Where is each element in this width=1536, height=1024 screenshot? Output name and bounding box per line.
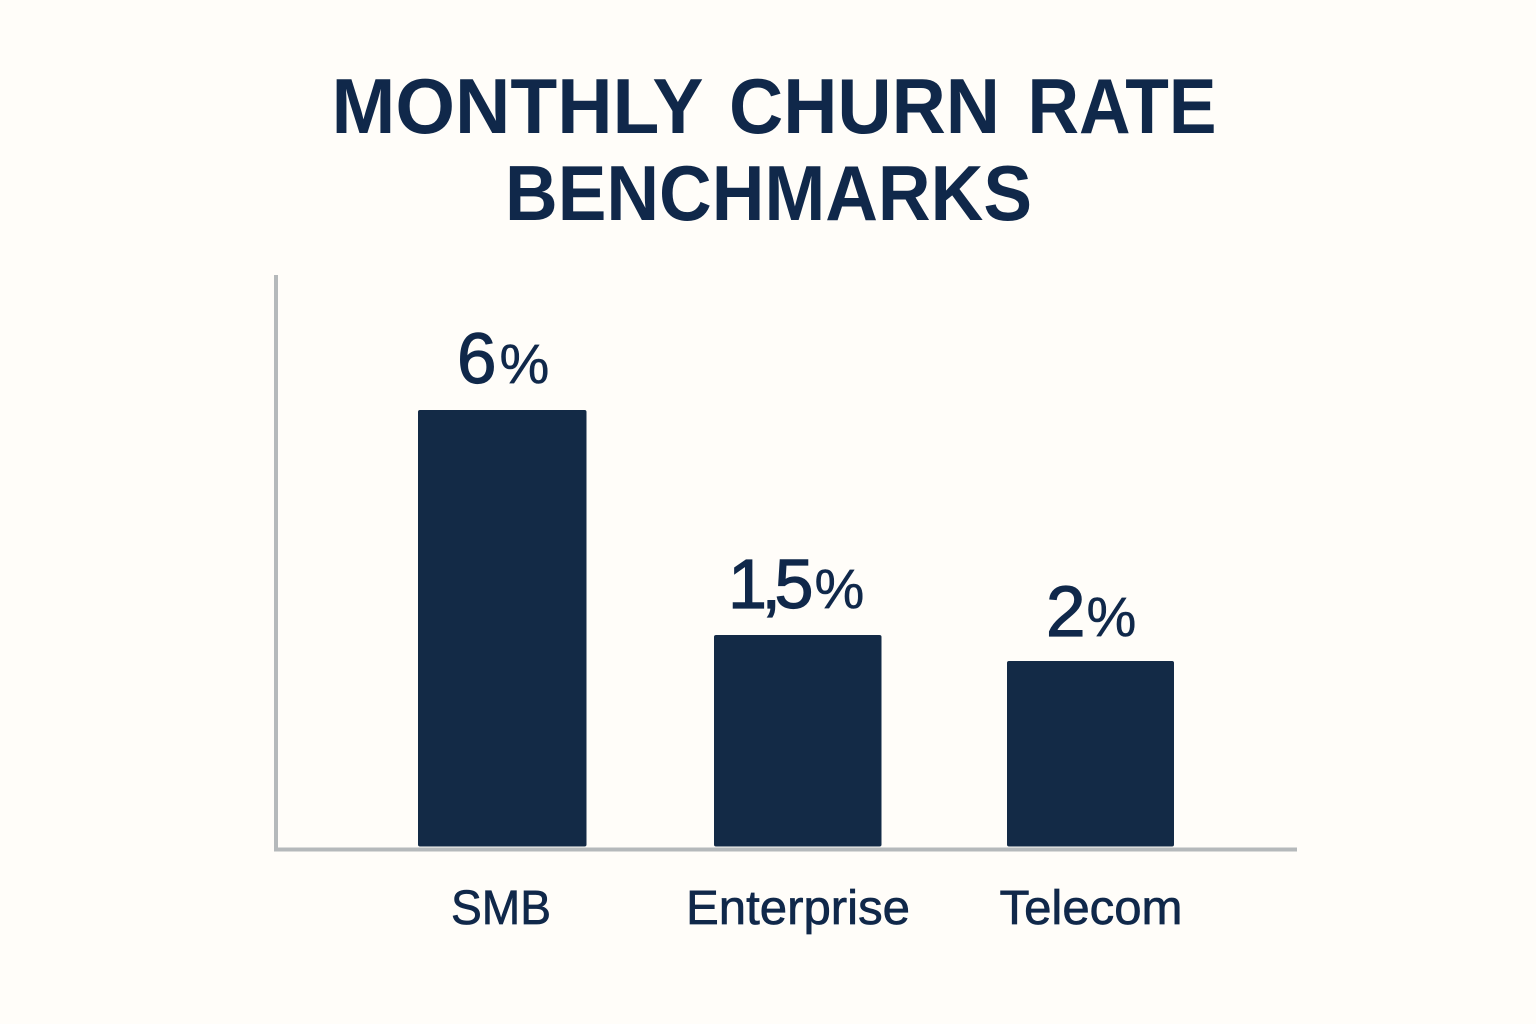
title: MONTHLY (332, 62, 704, 150)
value: Enterprise 1,5%: 5 (774, 545, 813, 623)
title: CHURN (729, 62, 1000, 150)
title: RATE (1028, 62, 1216, 150)
bar: SMB (418, 410, 586, 846)
value: SMB 6%: % (500, 332, 549, 395)
label: SMB: SMB (451, 882, 551, 935)
value: Enterprise 1,5%: % (814, 557, 864, 620)
x axis (274, 848, 1297, 852)
bar: Enterprise (714, 635, 882, 846)
value: Enterprise 1,5%: 1 (728, 545, 767, 623)
bar chart (274, 275, 1297, 935)
value: SMB 6%: 6 (457, 320, 496, 399)
y axis (274, 275, 278, 851)
value: Telecom 2%: 2 (1046, 573, 1086, 652)
bar: Telecom (1007, 661, 1174, 846)
title (332, 62, 1216, 237)
label: Telecom: Telecom (1000, 882, 1182, 935)
label: Enterprise: Enterprise (686, 882, 910, 935)
title: BENCHMARKS (505, 149, 1032, 237)
value: Telecom 2%: % (1086, 585, 1136, 648)
value: Enterprise 1,5%: , (762, 545, 781, 623)
